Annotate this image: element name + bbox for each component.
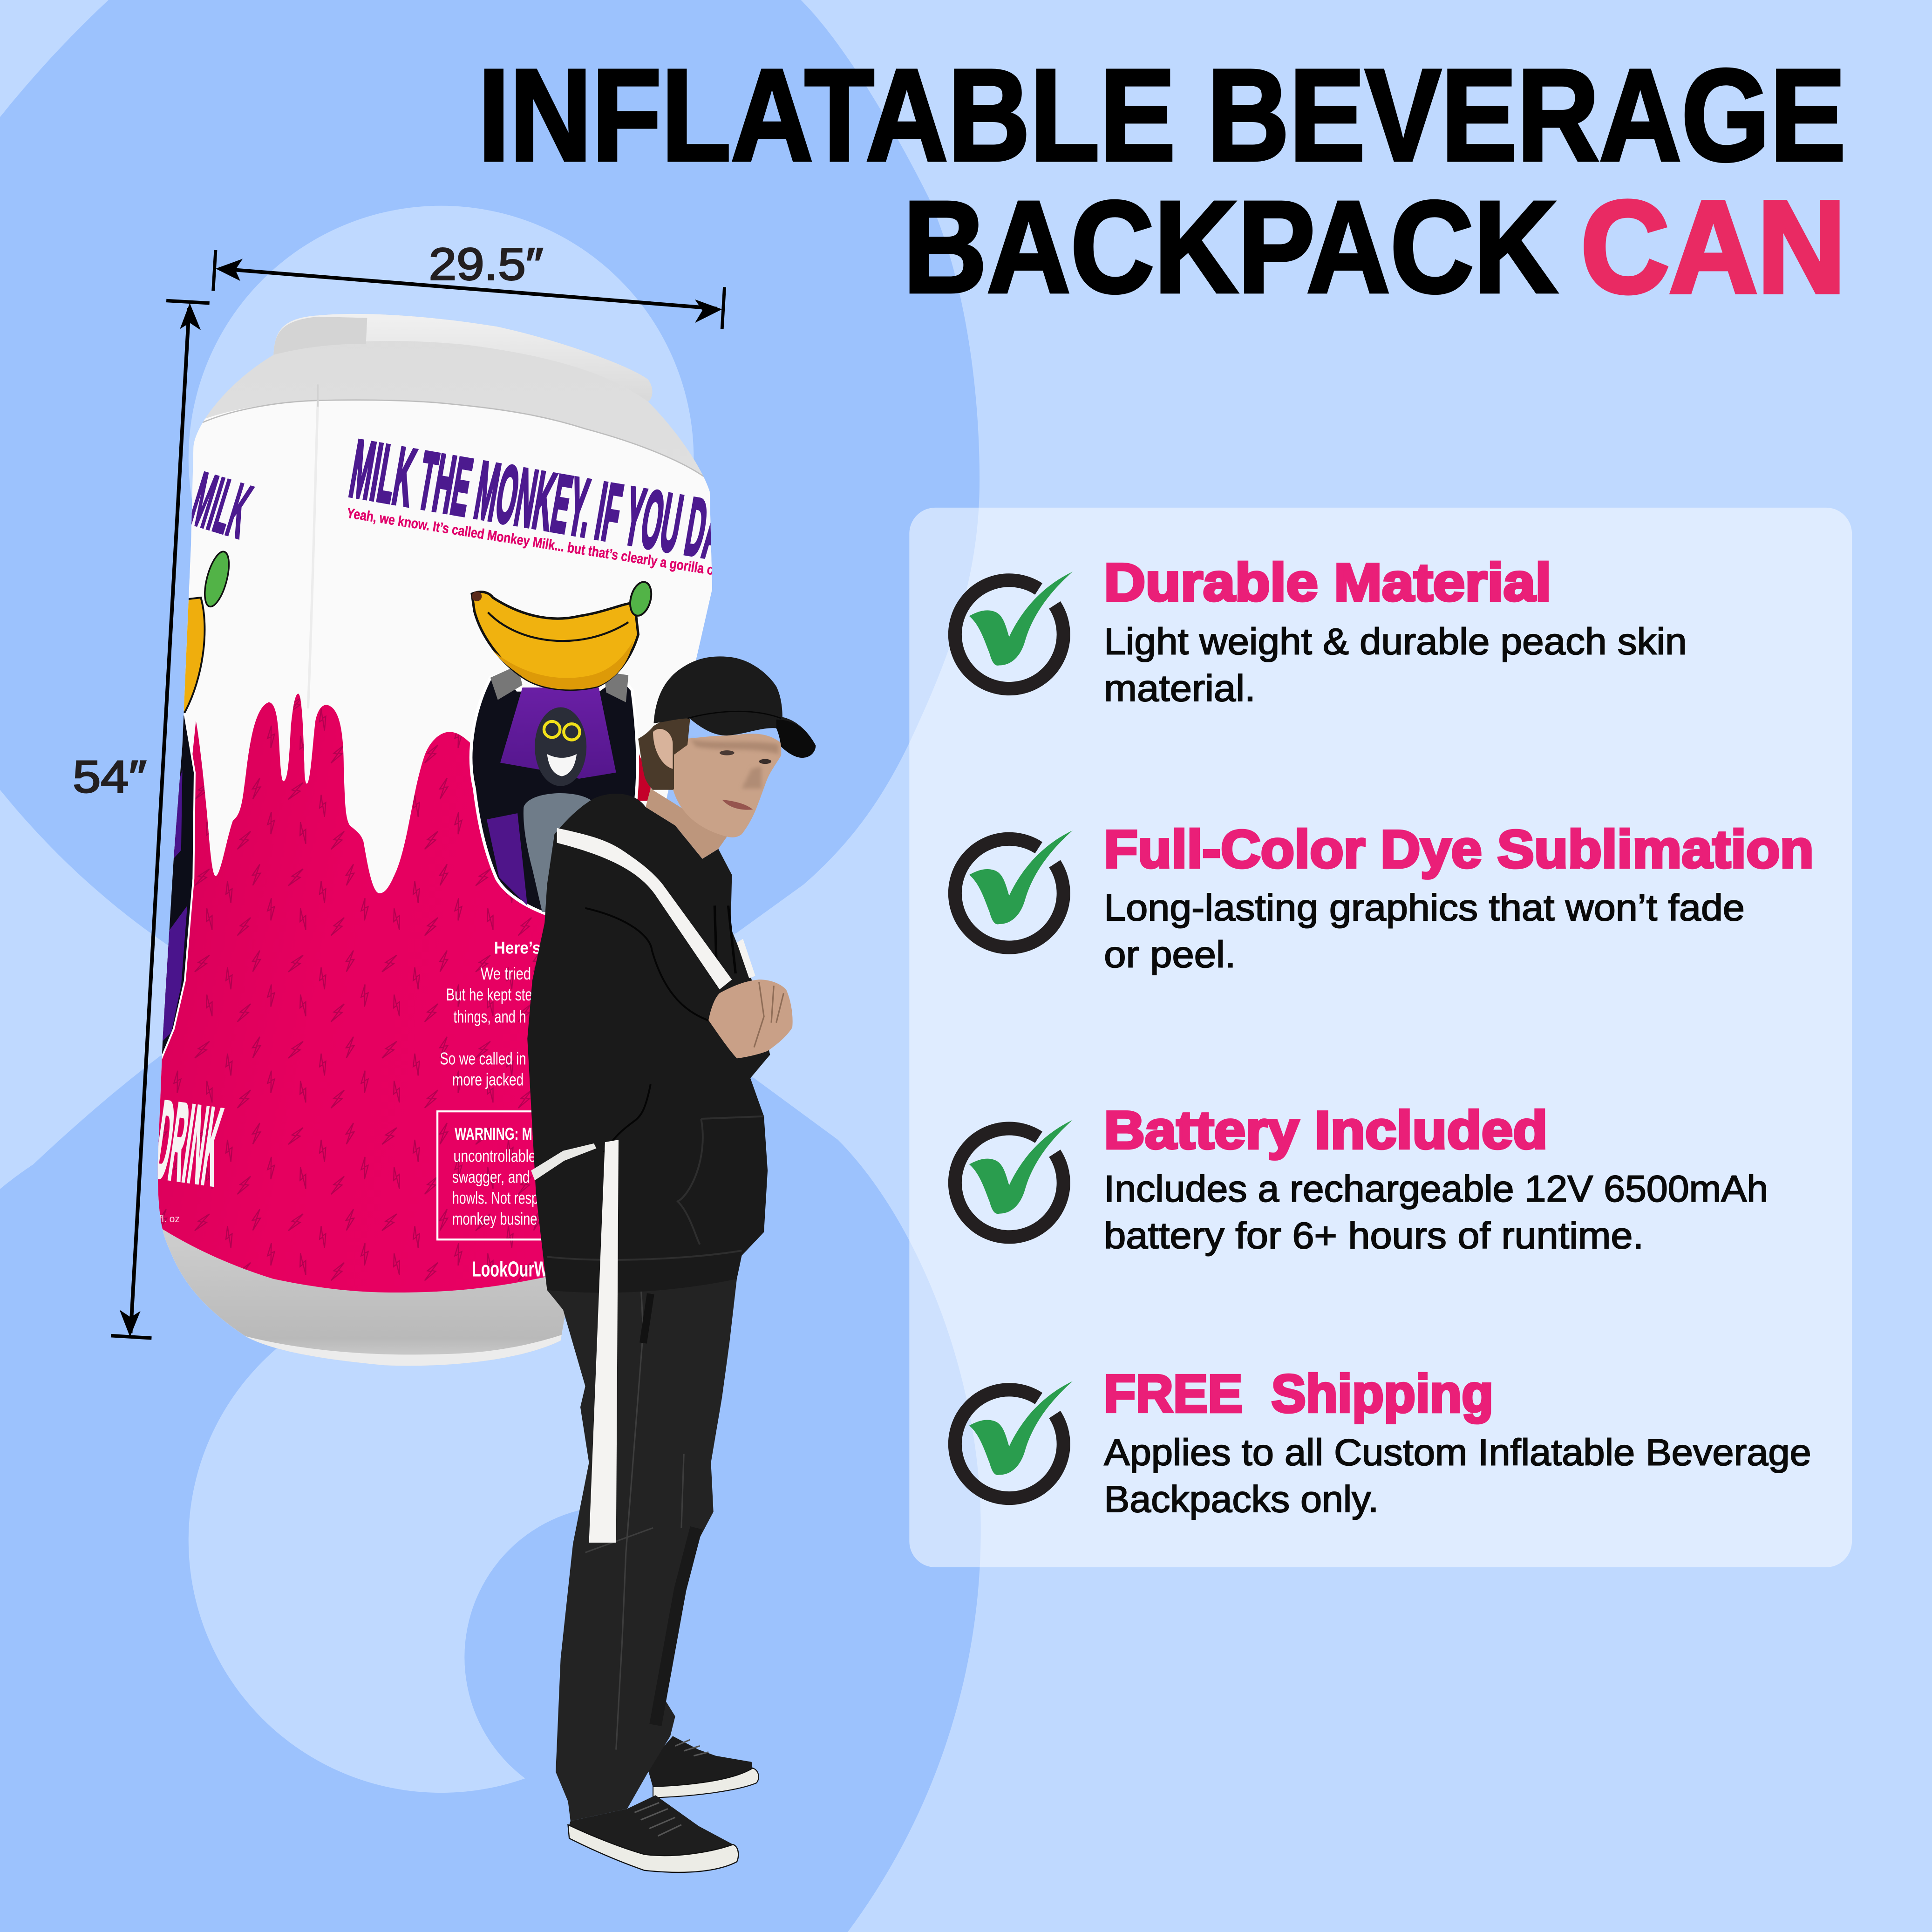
near shoe upper [568,1795,735,1862]
text: battery: Includes a rechargeable 12V 6500mAh [1104,1168,1768,1209]
near shoe sole [568,1825,738,1872]
bottom fold [234,1333,567,1380]
gorilla lower purple [487,813,527,905]
silver bottom [163,1229,565,1366]
strap: shoulder [557,828,732,989]
heading: durable material: Durable Material [1104,553,1551,612]
strap: hanging [589,1140,619,1543]
gorilla badge [471,666,638,918]
neck [646,789,727,859]
cap [653,656,816,758]
banana curve [488,612,628,641]
left banana stem [200,549,234,609]
left banana [148,598,204,714]
story copy on can [440,938,541,1089]
panel: features [909,508,1852,1567]
dimension: width [213,238,724,329]
gorilla goggles [544,721,580,740]
icon: check 2 [955,830,1073,947]
width line and ticks [213,250,724,329]
warning box: WARNING: M [455,1124,532,1143]
left sliver purple [163,770,187,1041]
dimension: height [73,300,210,1338]
cap brim [776,720,816,758]
cap seam [687,711,781,718]
title accent word: CAN [1581,174,1846,320]
inflatable can [157,314,712,1366]
face [673,734,781,837]
title line 2: BACKPACK [903,174,1558,320]
story copy on can: We tried [481,964,531,983]
shoes [568,1736,759,1872]
hair [639,719,689,789]
strap: side [531,1143,596,1180]
width label: 29.5″ [429,238,544,290]
gorilla head [535,707,586,786]
story copy on can: more jacked [452,1070,524,1089]
text: durable material: Light weight & durable peach skin [1104,621,1687,662]
title [478,42,1846,320]
warning box: uncontrollable [454,1146,536,1166]
text: MILK THE MONKEY. IF YOU DARE. [345,423,773,584]
ear [653,729,673,769]
icon: check 4 [955,1381,1073,1498]
gorilla purple backdrop [500,687,616,779]
hand [708,980,793,1058]
text: free shipping: Applies to all Custom Inflatable Beverage [1104,1431,1811,1473]
width arrowheads [216,259,722,323]
inflatable can: DRINK [150,1077,228,1209]
lid left panel [273,317,367,355]
gorilla hands [490,666,628,702]
gorilla torso [524,793,598,914]
warning box: howls. Not resp [452,1188,538,1208]
strap: thin cord [737,939,755,978]
banana stem [627,579,655,618]
eye left [720,750,735,755]
left gorilla sliver [162,714,196,1059]
icon: check 1 [955,571,1073,689]
banana [472,579,655,689]
small size note: fl. oz [159,1214,180,1225]
text: dye sublimation: or peel. [1104,934,1236,975]
neck and face [639,719,781,859]
height label: 54″ [73,751,147,802]
text: dye sublimation: Long-lasting graphics that won’t fade [1104,887,1745,928]
trousers [547,1279,737,1821]
subline on can: Yeah, we know. It’s called Monkey Milk... but that’s clearly a gorilla on the can. [346,505,768,586]
story copy on can: So we called in [440,1049,526,1068]
laces [634,1740,708,1836]
warning box: monkey busine [452,1209,537,1229]
man wearing backpack [527,656,816,1872]
text: free shipping: Backpacks only. [1104,1478,1379,1520]
seams [202,384,706,708]
height line and ticks [111,300,210,1338]
warning box [437,1111,573,1239]
inflatable can: MILK [183,456,259,554]
banana tip [472,592,482,601]
pink wave [148,694,641,1293]
story copy on can: Here’s [494,938,541,958]
banana shade [493,641,633,689]
can silhouette and shoulder [158,314,712,1366]
story copy on can: But he kept ste [446,985,532,1004]
website: LookOurW [472,1257,548,1281]
trouser folds [585,1281,696,1749]
hoodie details [547,905,764,1260]
text: durable material: material. [1104,667,1256,709]
height arrowheads [120,303,201,1337]
white label [148,400,714,1355]
eye right [759,759,771,764]
heading: dye sublimation: Full-Color Dye Sublimation [1104,820,1814,879]
far shoe sole [653,1768,759,1798]
red art patch [637,749,651,801]
far shoe upper [647,1736,753,1796]
mouth [722,800,753,810]
gorilla teeth [547,754,577,776]
hoodie [527,794,770,1293]
nose shadow [742,766,762,789]
can lid [276,314,611,361]
lightning pattern [159,698,539,1281]
icon: check 3 [955,1120,1073,1237]
text: battery: battery for 6+ hours of runtime. [1104,1215,1644,1256]
finger lines [754,982,783,1048]
story copy on can: things, and h [454,1007,526,1027]
warning box: swagger, and [452,1167,530,1187]
heading: battery: Battery Included [1104,1101,1548,1160]
cap shadow on brow [690,739,779,754]
heading: free shipping: FREE Shipping [1104,1365,1493,1424]
